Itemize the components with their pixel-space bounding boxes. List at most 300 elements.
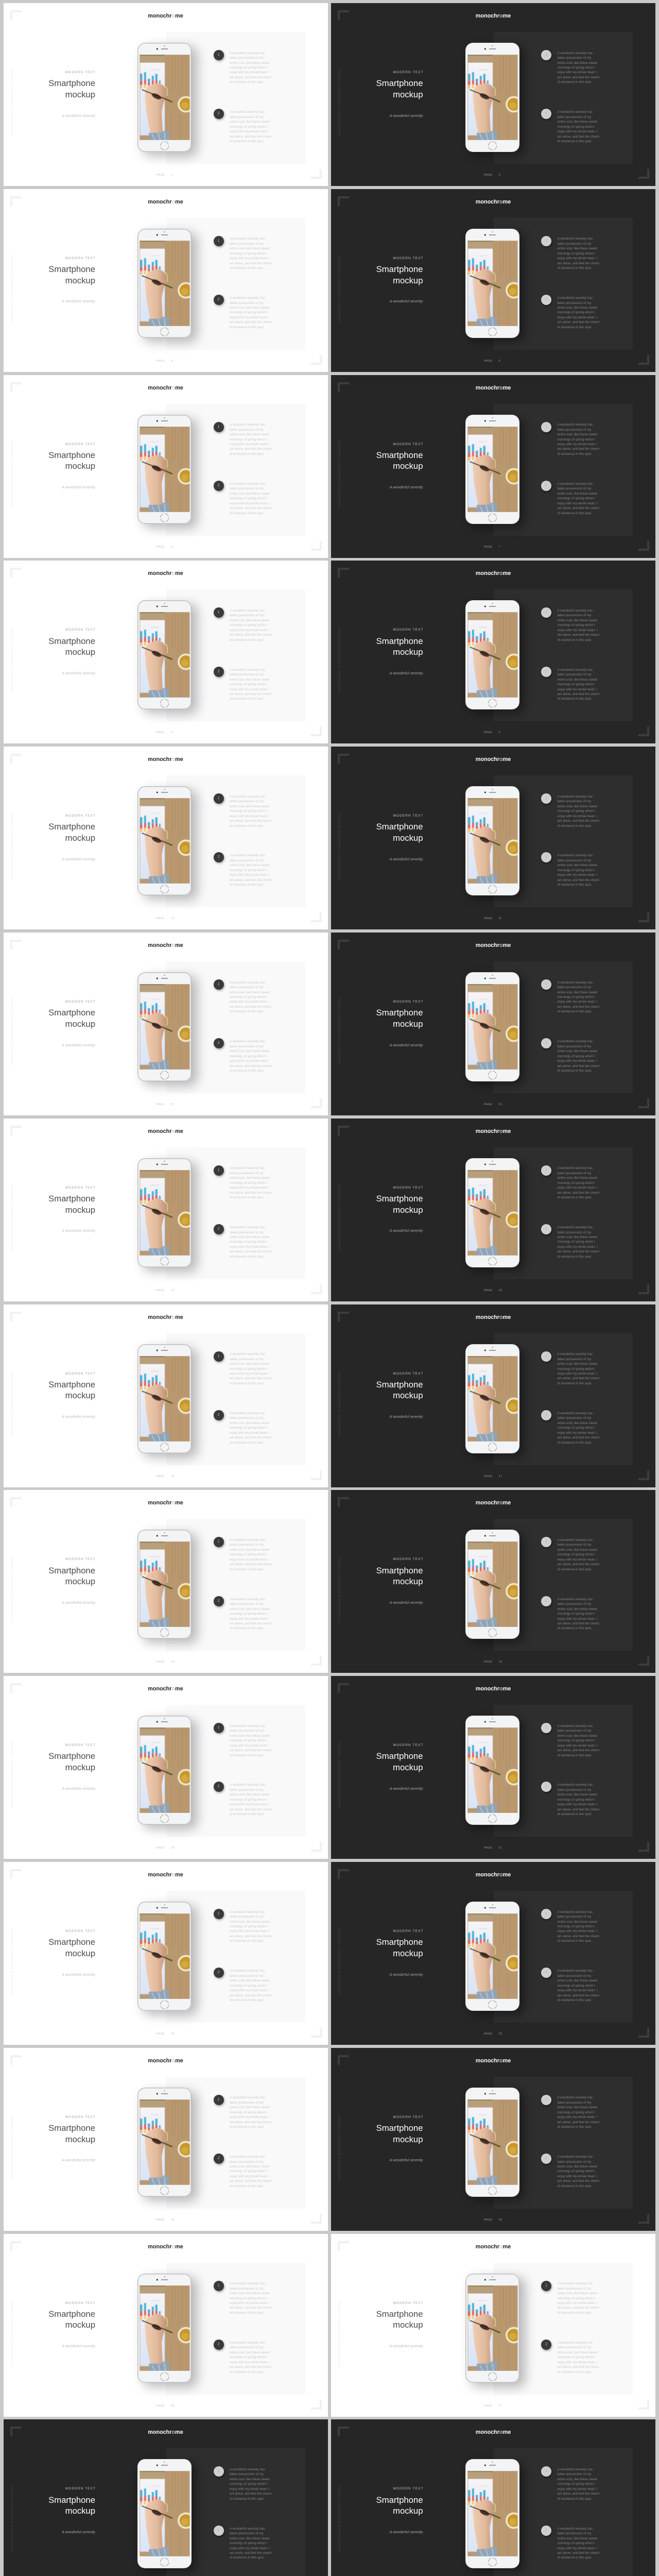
slide 2 dark <box>331 3 655 186</box>
step 1: of existence in this spot. <box>557 1754 592 1757</box>
step 1: entire soul, like these sweet <box>557 805 597 808</box>
heading block: MODERN TEXT <box>393 814 423 818</box>
slide 6 dark <box>331 375 655 558</box>
step 1: enjoy with my whole heart. I <box>230 1929 270 1933</box>
step 1: mornings of spring which I <box>557 2482 595 2486</box>
vertical label: monochrome presentation template <box>338 440 341 507</box>
step 2 <box>541 2340 608 2375</box>
heading block: Smartphone <box>376 822 423 832</box>
page number: PAGE <box>157 1660 165 1664</box>
step 2: mornings of spring which I <box>557 497 595 500</box>
vertical label: monochrome presentation template <box>338 812 341 879</box>
step 1: mornings of spring which I <box>230 1925 267 1928</box>
step 2: 2 <box>545 670 547 673</box>
step 1: enjoy with my whole heart. I <box>557 443 597 446</box>
step 1: taken possession of my <box>230 1172 264 1175</box>
step 2: mornings of spring which I <box>230 1055 267 1058</box>
step 2: 2 <box>545 1599 547 1603</box>
step 2: enjoy with my whole heart. I <box>557 502 597 505</box>
logo: monochrome <box>476 2058 511 2064</box>
logo: monochrome <box>476 2244 511 2250</box>
page number: 20 <box>171 1846 175 1850</box>
step 2: A wonderful serenity has <box>557 1412 593 1415</box>
step 2: mornings of spring which I <box>557 1798 595 1802</box>
step 1: am alone, and feel the charm <box>557 1563 599 1566</box>
logo: monochrome <box>148 1500 183 1506</box>
slide 22 dark <box>331 1862 655 2045</box>
step 1: A wonderful serenity has <box>230 1166 265 1170</box>
step 2: am alone, and feel the charm <box>557 2551 599 2555</box>
logo: monochrome <box>476 2429 511 2435</box>
heading block: A wonderful serenity <box>62 2344 95 2348</box>
step 1: taken possession of my <box>557 1358 591 1361</box>
slide 10 dark <box>331 747 655 929</box>
step 2: am alone, and feel the charm <box>557 1064 599 1068</box>
page number: PAGE <box>484 2218 492 2222</box>
step 2: mornings of spring which I <box>230 869 267 872</box>
step 2: taken possession of my <box>557 673 591 676</box>
step 1: entire soul, like these sweet <box>230 2106 269 2109</box>
step 1: A wonderful serenity has <box>557 981 593 985</box>
heading block: Smartphone <box>376 1194 423 1204</box>
step 2: entire soul, like these sweet <box>557 1793 597 1797</box>
slide 13 light <box>3 1118 327 1301</box>
step 1: A wonderful serenity has <box>230 237 265 241</box>
panel <box>494 1891 633 2023</box>
step 2: 2 <box>218 1227 219 1231</box>
panel <box>494 2448 633 2576</box>
step 2: am alone, and feel the charm <box>230 135 272 139</box>
step 2: mornings of spring which I <box>557 1055 595 1058</box>
page number: PAGE <box>157 1289 165 1292</box>
step 1 <box>213 2466 280 2501</box>
step 1: entire soul, like these sweet <box>557 61 597 65</box>
logo: monochrome <box>476 13 511 19</box>
heading block: Smartphone <box>376 1008 423 1018</box>
step 2: enjoy with my whole heart. I <box>230 130 270 133</box>
step 2: enjoy with my whole heart. I <box>230 1989 270 1992</box>
step 1: mornings of spring which I <box>230 1739 267 1742</box>
heading block: Smartphone <box>48 1751 95 1761</box>
heading block: MODERN TEXT <box>65 257 96 260</box>
step 2 <box>213 108 272 143</box>
step 2: taken possession of my <box>230 859 264 862</box>
step 1: A wonderful serenity has <box>557 1166 593 1170</box>
heading block: A wonderful serenity <box>390 2344 423 2348</box>
heading block: A wonderful serenity <box>390 1228 423 1233</box>
step 1 <box>541 1537 608 1572</box>
page number <box>157 2217 175 2223</box>
heading block: MODERN TEXT <box>65 1000 96 1004</box>
heading block: Smartphone <box>48 1937 95 1947</box>
step 2: entire soul, like these sweet <box>557 1607 597 1611</box>
heading block: mockup <box>65 90 95 99</box>
step 2: 2 <box>218 112 219 115</box>
step 1: A wonderful serenity has <box>230 1724 265 1728</box>
heading block <box>24 1557 95 1605</box>
step 1: taken possession of my <box>557 2472 591 2476</box>
step 1: A wonderful serenity has <box>557 2096 593 2099</box>
step 2: A wonderful serenity has <box>557 668 593 672</box>
step 1: taken possession of my <box>557 242 591 246</box>
step 2 <box>213 1968 280 2003</box>
vertical label: monochrome presentation template <box>10 440 13 507</box>
panel <box>166 2077 305 2209</box>
step 2: am alone, and feel the charm <box>230 1622 272 1625</box>
panel <box>494 1705 633 1837</box>
step 2 <box>213 2526 280 2561</box>
step 1: entire soul, like these sweet <box>557 1176 597 1180</box>
slide 23 light <box>3 2048 327 2231</box>
step 2: entire soul, like these sweet <box>230 863 269 867</box>
slide 15 light <box>3 1304 327 1487</box>
step 2 <box>213 1224 280 1259</box>
step 1: of existence in this spot. <box>557 452 592 456</box>
slide 25 light <box>3 2234 327 2417</box>
step 1: of existence in this spot. <box>557 1568 592 1571</box>
page number <box>157 1659 175 1665</box>
heading block: MODERN TEXT <box>393 1929 423 1933</box>
heading block: MODERN TEXT <box>65 628 96 632</box>
heading block: MODERN TEXT <box>65 1743 96 1747</box>
phone <box>465 1530 519 1639</box>
heading block: A wonderful serenity <box>390 2530 423 2534</box>
panel <box>166 32 305 164</box>
step 2: mornings of spring which I <box>230 2355 267 2359</box>
step 1: entire soul, like these sweet <box>230 433 269 436</box>
heading block: A wonderful serenity <box>390 671 423 675</box>
heading block: mockup <box>65 461 95 471</box>
step 1: mornings of spring which I <box>557 995 595 999</box>
step 2: of existence in this spot. <box>557 326 592 329</box>
heading block <box>48 443 96 489</box>
step 2: mornings of spring which I <box>557 1240 595 1244</box>
page number <box>157 916 175 921</box>
heading block: A wonderful serenity <box>62 2530 95 2534</box>
heading block <box>24 2301 95 2349</box>
step 2: am alone, and feel the charm <box>557 320 599 324</box>
heading block: MODERN TEXT <box>393 2487 423 2490</box>
step 1: taken possession of my <box>230 614 264 617</box>
heading block: MODERN TEXT <box>65 2115 96 2119</box>
step 1: of existence in this spot. <box>557 266 592 270</box>
step 1: am alone, and feel the charm <box>230 76 272 79</box>
heading block: A wonderful serenity <box>62 1228 95 1233</box>
logo: monochrome <box>148 1686 183 1692</box>
panel <box>166 404 305 536</box>
step 2: entire soul, like these sweet <box>557 1235 597 1239</box>
step 1 <box>213 607 272 642</box>
step 2: mornings of spring which I <box>557 311 595 314</box>
step 1: of existence in this spot. <box>230 1754 264 1757</box>
step 1: am alone, and feel the charm <box>557 1749 599 1752</box>
step 1: enjoy with my whole heart. I <box>557 1000 597 1004</box>
step 1: entire soul, like these sweet <box>230 2292 269 2295</box>
heading block: mockup <box>65 2506 95 2516</box>
step 1: of existence in this spot. <box>230 1568 264 1571</box>
step 2: mornings of spring which I <box>557 125 595 129</box>
heading block: mockup <box>393 1948 423 1958</box>
page number: 12 <box>171 1103 175 1106</box>
step 1: 1 <box>218 425 219 429</box>
page number: PAGE <box>484 1289 492 1292</box>
step 1: of existence in this spot. <box>230 1939 264 1943</box>
slide 18 dark <box>331 1490 655 1673</box>
step 1: of existence in this spot. <box>557 2497 592 2501</box>
logo: monochrome <box>148 942 183 948</box>
page number <box>157 1474 175 1479</box>
step 2: taken possession of my <box>230 2346 264 2349</box>
step 1: of existence in this spot. <box>230 1010 264 1013</box>
step 1: 1 <box>218 2284 219 2287</box>
heading block: Smartphone <box>376 1566 423 1575</box>
vertical label: monochrome presentation template <box>10 2299 13 2366</box>
step 2: mornings of spring which I <box>230 2541 267 2545</box>
step 1 <box>541 1723 608 1758</box>
step 1: 1 <box>218 53 219 57</box>
step 2 <box>213 1782 280 1817</box>
page number <box>484 1845 502 1851</box>
step 1: A wonderful serenity has <box>230 1352 265 1356</box>
step 1: 1 <box>218 611 219 614</box>
step 2: mornings of spring which I <box>230 1984 267 1988</box>
heading block: Smartphone <box>376 636 423 646</box>
step 1: mornings of spring which I <box>557 1553 595 1556</box>
heading block: A wonderful serenity <box>390 299 423 303</box>
heading block: MODERN TEXT <box>65 2487 96 2490</box>
step 1: mornings of spring which I <box>230 2482 267 2486</box>
page number: 11 <box>498 917 502 920</box>
step 1: entire soul, like these sweet <box>230 61 269 65</box>
step 1: entire soul, like these sweet <box>557 2292 597 2295</box>
panel <box>494 1333 633 1465</box>
heading block: mockup <box>393 647 423 657</box>
step 1: enjoy with my whole heart. I <box>557 1186 597 1190</box>
step 1 <box>541 607 599 642</box>
step 1: taken possession of my <box>557 986 591 989</box>
heading block: mockup <box>393 2506 423 2516</box>
step 1: mornings of spring which I <box>230 2297 267 2300</box>
step 2: entire soul, like these sweet <box>557 678 597 682</box>
heading block: mockup <box>65 276 95 285</box>
heading block: MODERN TEXT <box>393 257 423 260</box>
step 1: mornings of spring which I <box>557 1739 595 1742</box>
vertical label: monochrome presentation template <box>10 1927 13 1994</box>
page number <box>157 2403 175 2409</box>
logo: monochrome <box>148 13 183 19</box>
step 1: taken possession of my <box>230 2101 264 2105</box>
step 2: A wonderful serenity has <box>230 1598 265 1601</box>
step 1: am alone, and feel the charm <box>557 1935 599 1938</box>
step 2: A wonderful serenity has <box>230 668 265 672</box>
step 2: entire soul, like these sweet <box>230 1793 269 1797</box>
step 1 <box>541 1909 608 1944</box>
step 1: entire soul, like these sweet <box>557 1548 597 1552</box>
vertical label: monochrome presentation template <box>10 626 13 693</box>
step 1: entire soul, like these sweet <box>557 1734 597 1738</box>
slide 17 light <box>3 1490 327 1673</box>
step 1: taken possession of my <box>557 1172 591 1175</box>
step 2: 2 <box>218 1413 219 1417</box>
step 2 <box>541 1782 608 1817</box>
heading block: A wonderful serenity <box>390 1043 423 1047</box>
step 2: 2 <box>545 2157 547 2160</box>
step 1: A wonderful serenity has <box>557 1352 593 1356</box>
step 2: entire soul, like these sweet <box>230 1421 269 1425</box>
step 2: A wonderful serenity has <box>230 482 265 486</box>
panel <box>494 2077 633 2209</box>
phone <box>137 2459 192 2568</box>
step 2: enjoy with my whole heart. I <box>557 2175 597 2178</box>
phone <box>137 786 192 895</box>
heading block: Smartphone <box>376 1380 423 1389</box>
step 1: A wonderful serenity has <box>230 2468 265 2471</box>
heading block: A wonderful serenity <box>62 671 95 675</box>
step 1: mornings of spring which I <box>230 2111 267 2114</box>
heading block: MODERN TEXT <box>393 2115 423 2119</box>
step 1: of existence in this spot. <box>557 80 592 84</box>
heading block: Smartphone <box>48 264 95 274</box>
step 2: of existence in this spot. <box>557 1441 592 1445</box>
heading block <box>352 2115 423 2163</box>
phone <box>137 2274 192 2383</box>
step 2: A wonderful serenity has <box>557 296 593 300</box>
step 2: 2 <box>218 2157 219 2160</box>
step 1: A wonderful serenity has <box>230 1538 265 1542</box>
step 1: am alone, and feel the charm <box>557 2121 599 2124</box>
step 2: entire soul, like these sweet <box>557 2351 597 2354</box>
step 2: mornings of spring which I <box>230 683 267 686</box>
step 2: mornings of spring which I <box>557 2355 595 2359</box>
step 2: taken possession of my <box>557 1602 591 1606</box>
heading block: MODERN TEXT <box>393 1186 423 1190</box>
step 2: am alone, and feel the charm <box>557 2179 599 2183</box>
step 2: entire soul, like these sweet <box>557 2165 597 2168</box>
step 1: taken possession of my <box>230 986 264 989</box>
heading block <box>24 2115 95 2163</box>
step 1: A wonderful serenity has <box>557 1538 593 1542</box>
step 2: 2 <box>545 1041 547 1045</box>
step 2: entire soul, like these sweet <box>230 1607 269 1611</box>
heading block: Smartphone <box>48 450 95 460</box>
step 1: mornings of spring which I <box>557 66 595 70</box>
page number: 2 <box>171 174 172 177</box>
vertical label: monochrome presentation template <box>338 1370 341 1437</box>
slide 24 dark <box>331 2048 655 2231</box>
step 2: enjoy with my whole heart. I <box>557 1803 597 1806</box>
heading block <box>352 1557 423 1605</box>
step 1: 1 <box>218 796 219 800</box>
vertical label: monochrome presentation template <box>338 2485 341 2552</box>
panel <box>494 404 633 536</box>
step 2 <box>541 667 599 701</box>
panel <box>494 589 633 721</box>
page number: 3 <box>498 174 500 177</box>
step 1: 1 <box>218 1354 219 1358</box>
step 2: 2 <box>545 298 547 301</box>
step 2: taken possession of my <box>557 115 591 119</box>
step 1: 1 <box>545 1168 547 1172</box>
logo: monochrome <box>148 2429 183 2435</box>
step 1: A wonderful serenity has <box>557 423 593 427</box>
heading block: MODERN TEXT <box>393 628 423 632</box>
step 2: of existence in this spot. <box>557 1255 592 1259</box>
page number: PAGE <box>484 1660 492 1664</box>
page number: PAGE <box>157 174 165 177</box>
page number <box>157 360 172 363</box>
page number <box>484 2031 502 2037</box>
heading block: MODERN TEXT <box>393 1372 423 1376</box>
heading block: A wonderful serenity <box>62 1786 95 1791</box>
step 2: taken possession of my <box>557 1231 591 1234</box>
page number <box>484 2403 502 2409</box>
vertical label: monochrome presentation template <box>338 626 341 693</box>
step 2: enjoy with my whole heart. I <box>557 2361 597 2364</box>
heading block: MODERN TEXT <box>65 2301 96 2305</box>
step 1: taken possession of my <box>557 800 591 803</box>
page number <box>157 1845 175 1851</box>
step 1: entire soul, like these sweet <box>230 990 269 994</box>
step 2: enjoy with my whole heart. I <box>557 1431 597 1435</box>
phone <box>137 972 192 1081</box>
heading block: Smartphone <box>48 822 95 832</box>
step 2: mornings of spring which I <box>557 1426 595 1430</box>
heading block: MODERN TEXT <box>393 1743 423 1747</box>
page number <box>157 2031 175 2037</box>
heading block: A wonderful serenity <box>390 1972 423 1977</box>
step 2: of existence in this spot. <box>230 1069 264 1073</box>
step 1: A wonderful serenity has <box>557 1724 593 1728</box>
page number: PAGE <box>484 1475 492 1478</box>
heading block: MODERN TEXT <box>393 2301 423 2305</box>
step 2: A wonderful serenity has <box>230 1226 265 1229</box>
step 2: enjoy with my whole heart. I <box>230 1617 270 1621</box>
page number: PAGE <box>484 2404 492 2408</box>
step 2: entire soul, like these sweet <box>230 492 269 496</box>
step 1: enjoy with my whole heart. I <box>557 2301 597 2305</box>
step 2: taken possession of my <box>557 1045 591 1048</box>
panel <box>166 218 305 350</box>
heading block: mockup <box>65 1205 95 1215</box>
heading block: mockup <box>65 833 95 843</box>
logo: monochrome <box>476 1128 511 1134</box>
step 1: entire soul, like these sweet <box>230 1176 269 1180</box>
step 2: entire soul, like these sweet <box>230 678 269 682</box>
vertical label: monochrome presentation template <box>338 69 341 135</box>
step 1: 1 <box>545 982 547 986</box>
step 1: taken possession of my <box>557 428 591 432</box>
step 2: am alone, and feel the charm <box>230 1064 272 1068</box>
step 1: entire soul, like these sweet <box>230 619 269 622</box>
step 2 <box>541 1596 608 1631</box>
step 2: taken possession of my <box>230 301 264 305</box>
slide 3 light <box>3 189 327 372</box>
step 1: mornings of spring which I <box>557 2111 595 2114</box>
page number: 5 <box>498 360 500 363</box>
step 1: mornings of spring which I <box>557 1181 595 1185</box>
step 1: A wonderful serenity has <box>557 237 593 241</box>
vertical label: monochrome presentation template <box>10 2113 13 2180</box>
heading block: A wonderful serenity <box>62 1600 95 1605</box>
step 1: am alone, and feel the charm <box>230 1935 272 1938</box>
phone <box>137 600 192 709</box>
step 1: of existence in this spot. <box>230 2311 264 2315</box>
step 2: 2 <box>545 2343 547 2346</box>
step 2: taken possession of my <box>557 2532 591 2535</box>
step 1 <box>213 1723 280 1758</box>
step 1: mornings of spring which I <box>557 623 595 627</box>
step 1: 1 <box>545 2284 547 2287</box>
